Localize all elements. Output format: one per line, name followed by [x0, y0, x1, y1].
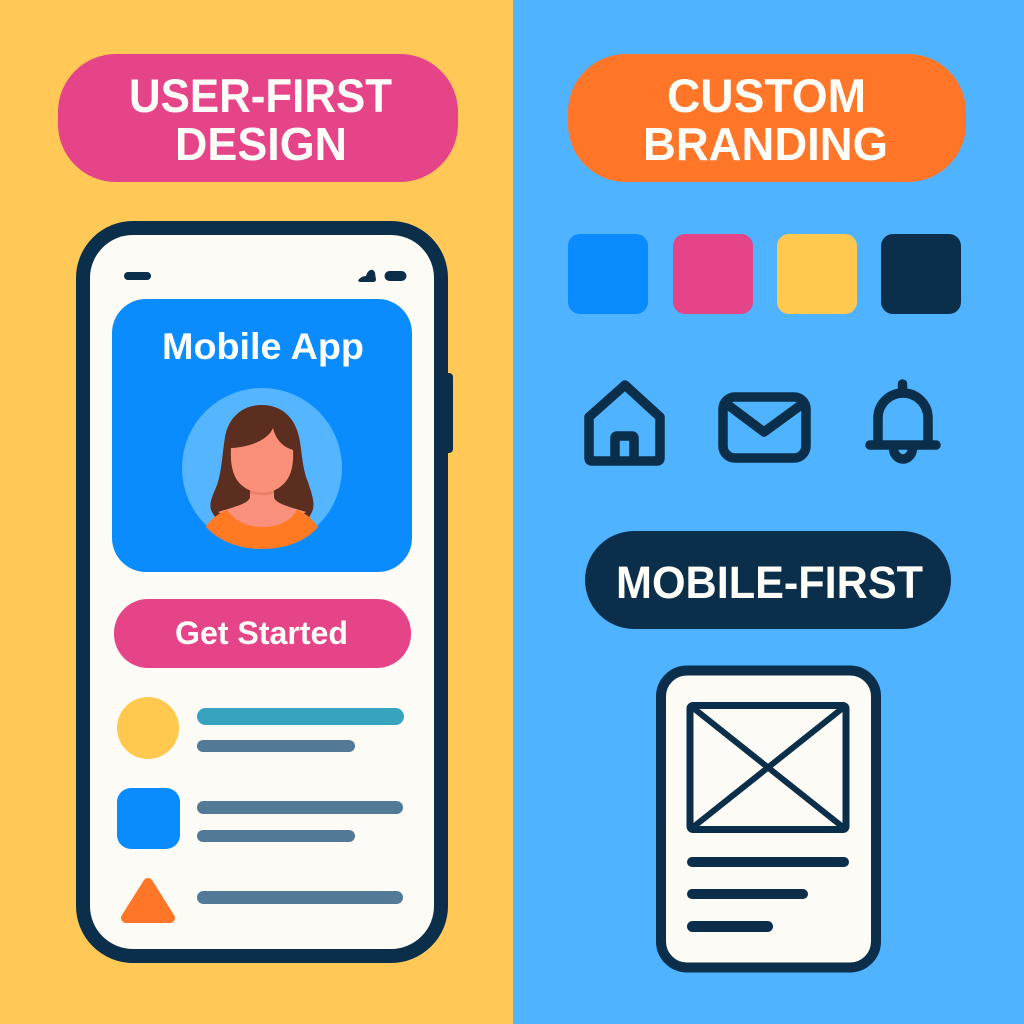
image placeholder [690, 706, 846, 830]
button: get started: Get Started [175, 615, 348, 651]
wireframe phone [661, 670, 876, 968]
avatar [182, 388, 342, 549]
heading pill: user-first design: DESIGN [175, 118, 347, 170]
heading pill: custom branding [568, 54, 966, 182]
text lines [687, 857, 849, 932]
status bar [124, 270, 406, 282]
app card [112, 299, 412, 572]
button: get started [114, 599, 411, 668]
icon: envelope [723, 397, 806, 458]
app card: Mobile App [162, 326, 364, 367]
phone body [83, 228, 441, 956]
phone side button [440, 373, 453, 453]
list item: triangle [126, 883, 403, 918]
phone mockup [83, 228, 453, 956]
icon: bell [870, 384, 936, 459]
list item: square [117, 788, 403, 849]
heading pill: custom branding: CUSTOM [667, 69, 866, 122]
list item: circle [117, 697, 404, 759]
icon: home [589, 385, 660, 461]
heading pill: custom branding: BRANDING [643, 118, 888, 170]
heading pill: user-first design [58, 54, 458, 182]
label pill: mobile-first [585, 531, 951, 629]
colour swatches [568, 234, 961, 314]
heading pill: user-first design: USER-FIRST [129, 69, 392, 122]
label pill: mobile-first: MOBILE-FIRST [616, 557, 923, 608]
